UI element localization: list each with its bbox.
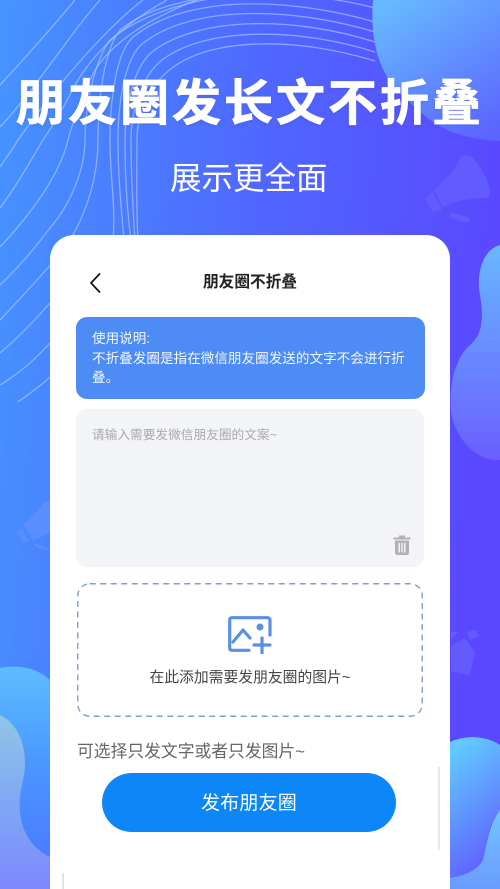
text: usage note: 不折叠发圈是指在微信朋友圈发送的文字不会进行折 — [92, 350, 405, 366]
text: upload hint: 在此添加需要发朋友圈的图片~ — [149, 670, 350, 686]
text: usage note: 叠。 — [92, 370, 119, 385]
heading: page title: 朋友圈不折叠 — [203, 274, 297, 291]
dashed border — [77, 583, 423, 717]
artifact: left grey line — [62, 873, 64, 889]
panel: image upload — [77, 583, 423, 717]
blob: bottom left inner — [0, 715, 50, 889]
icon: add image — [228, 616, 272, 654]
text: input placeholder: 请输入需要发微信朋友圈的文案~ — [92, 428, 277, 442]
blob: bottom right outer — [450, 737, 500, 878]
title: 朋友圈发长文不折叠 — [16, 77, 484, 131]
blob: bottom right inner — [450, 810, 500, 889]
text: option hint: 可选择只发文字或者只发图片~ — [77, 742, 305, 761]
icon: trash — [394, 536, 410, 555]
text: usage note: 使用说明: — [92, 331, 150, 346]
blob: top right — [372, 0, 500, 141]
button: publish: 发布朋友圈 — [201, 793, 297, 814]
icon: megaphone left — [16, 500, 52, 550]
blob: right middle — [451, 245, 500, 460]
button: publish — [102, 773, 396, 832]
icon: megaphone top right — [425, 155, 490, 222]
curved line pattern — [0, 0, 375, 402]
icon: back arrow — [90, 272, 101, 294]
artifact: right grey line — [438, 767, 440, 850]
subtitle: 展示更全面 — [170, 160, 328, 196]
blob: bottom left outer — [0, 667, 50, 857]
panel: usage note — [76, 317, 425, 399]
text: usage note — [92, 331, 405, 385]
panel: phone card — [50, 235, 450, 889]
icon: megaphone lower right — [451, 630, 479, 675]
panel: text input — [76, 409, 424, 567]
